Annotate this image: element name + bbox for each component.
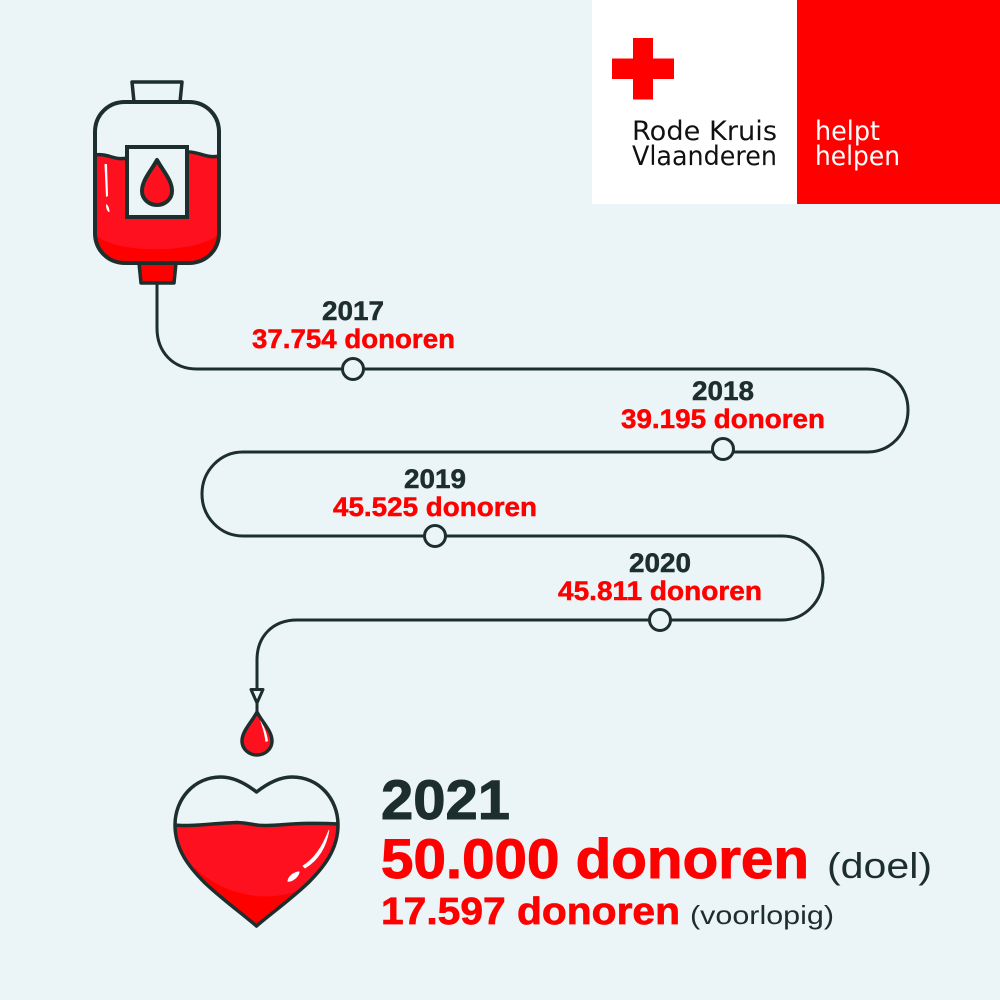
milestone 2018: 2018 — [692, 376, 754, 406]
icon: blood bag — [95, 82, 219, 283]
icon: heart — [170, 777, 345, 930]
bag label — [127, 147, 187, 217]
milestone 2020: 2020 — [629, 548, 691, 578]
milestone 2019: 45.525 donoren — [333, 492, 537, 522]
result 2021: (doel) — [827, 845, 932, 886]
heart outline — [175, 777, 338, 926]
result 2021: (voorlopig) — [690, 900, 834, 930]
milestone 2017 — [252, 296, 455, 380]
arrow tip — [251, 690, 263, 712]
provisional count: 17.597 donoren — [381, 891, 680, 933]
milestone 2017: 37.754 donoren — [252, 324, 455, 354]
slogan — [815, 116, 900, 172]
milestone 2018: 39.195 donoren — [621, 404, 825, 434]
organisation name: Vlaanderen — [632, 141, 777, 172]
heart blood fill — [176, 824, 336, 924]
slogan: helpen — [815, 141, 900, 172]
bag highlights — [104, 164, 108, 197]
heart highlights — [303, 830, 329, 868]
year: 2021 — [381, 768, 510, 831]
icon: falling drop — [242, 712, 272, 755]
organisation name — [632, 116, 777, 172]
label drop — [142, 160, 172, 205]
icon: red cross — [612, 38, 674, 100]
result 2021 — [381, 768, 932, 933]
heart surface — [175, 822, 338, 826]
milestone 2018 — [621, 376, 825, 460]
milestone 2020 — [558, 548, 762, 630]
milestone 2017: 2017 — [322, 296, 384, 326]
bag cap — [132, 82, 182, 102]
logo: Rode Kruis Vlaanderen — [592, 0, 1000, 204]
bag outlet — [139, 263, 176, 283]
organisation name: Rode Kruis — [632, 116, 777, 147]
milestone 2019: 2019 — [404, 464, 466, 494]
slogan: helpt — [815, 116, 880, 147]
blood fill — [95, 150, 219, 263]
bag body — [95, 102, 219, 263]
goal: 50.000 donoren — [381, 827, 809, 890]
timeline tube — [157, 283, 908, 690]
milestone 2020: 45.811 donoren — [558, 576, 762, 606]
milestone 2019 — [333, 464, 537, 546]
